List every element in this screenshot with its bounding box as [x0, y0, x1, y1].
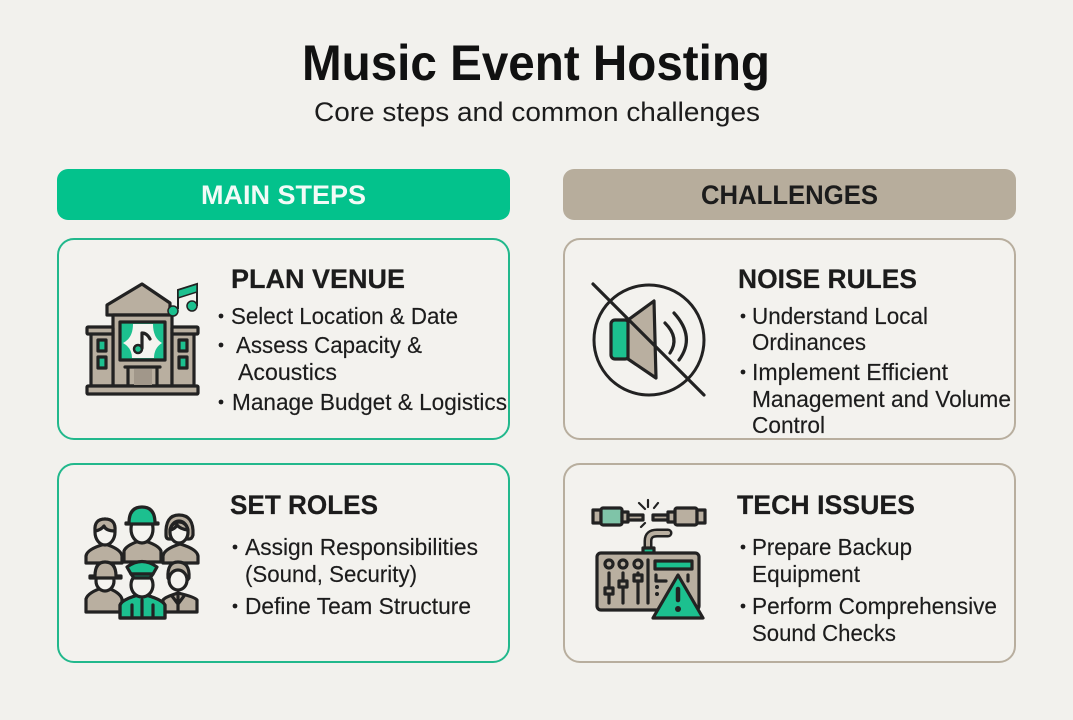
- text: noise rules: Understand Local: [752, 303, 928, 329]
- icon: muted speaker: [593, 284, 704, 395]
- text: set roles: SET ROLES: [230, 490, 378, 520]
- text: plan venue: Acoustics: [238, 359, 337, 385]
- title: Music Event Hosting: [302, 35, 770, 91]
- text: tech issues: Sound Checks: [752, 620, 896, 646]
- panel: plan venue: [58, 239, 509, 439]
- icon: team of people: [86, 507, 198, 618]
- text: plan venue: [219, 264, 507, 415]
- text: set roles: [230, 490, 478, 619]
- text: set roles: Assign Responsibilities: [245, 534, 478, 560]
- panel: tech issues: [564, 464, 1015, 662]
- text: noise rules: Ordinances: [752, 329, 866, 355]
- heading: main steps: MAIN STEPS: [201, 180, 366, 210]
- text: tech issues: Equipment: [752, 561, 861, 587]
- text: tech issues: TECH ISSUES: [737, 490, 915, 520]
- heading: challenges: [563, 169, 1016, 220]
- text: plan venue: PLAN VENUE: [231, 264, 405, 294]
- panel: noise rules: [564, 239, 1015, 439]
- text: set roles: Define Team Structure: [245, 593, 471, 619]
- heading: main steps: [57, 169, 510, 220]
- text: noise rules: NOISE RULES: [738, 264, 917, 294]
- text: tech issues: Perform Comprehensive: [752, 593, 997, 619]
- heading: challenges: CHALLENGES: [701, 180, 878, 210]
- text: tech issues: [737, 490, 997, 646]
- text: set roles: (Sound, Security): [245, 561, 417, 587]
- text: noise rules: Management and Volume: [752, 386, 1011, 412]
- text: noise rules: [738, 264, 1011, 438]
- text: plan venue: Assess Capacity &: [236, 332, 422, 358]
- icon: venue building with music note: [87, 284, 198, 394]
- text: tech issues: Prepare Backup: [752, 534, 912, 560]
- text: noise rules: Implement Efficient: [752, 359, 949, 385]
- subtitle: Core steps and common challenges: [314, 97, 760, 127]
- text: plan venue: Select Location & Date: [231, 303, 458, 329]
- text: plan venue: Manage Budget & Logistics: [232, 389, 507, 415]
- text: noise rules: Control: [752, 412, 825, 438]
- panel: set roles: [58, 464, 509, 662]
- icon: broken cable and mixer with warning: [593, 500, 705, 618]
